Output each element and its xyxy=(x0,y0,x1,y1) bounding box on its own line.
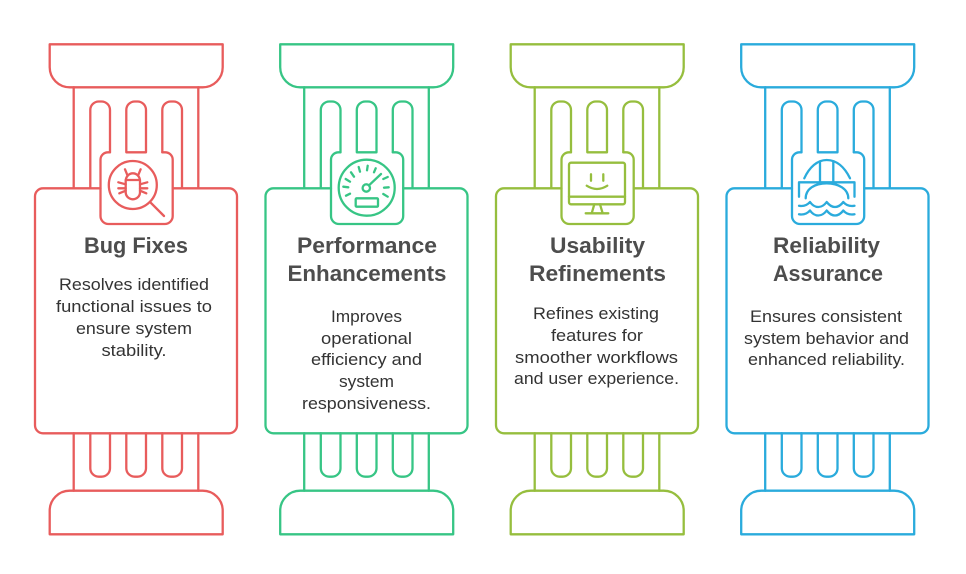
heading: reliability assurance: Reliability xyxy=(773,233,880,258)
text: reliability description: enhanced reliability. xyxy=(748,350,905,369)
heading: performance enhancements xyxy=(288,233,446,286)
text: usability description xyxy=(514,304,679,388)
heading: usability refinements xyxy=(529,233,666,286)
pillar frame: reliability assurance xyxy=(726,44,928,534)
text: bug fixes description: Resolves identified xyxy=(59,275,209,294)
text: performance description: Improves xyxy=(331,307,402,326)
text: performance description: operational xyxy=(321,329,412,348)
pillar frame: performance enhancements xyxy=(266,44,468,534)
heading: performance enhancements: Performance xyxy=(297,233,437,258)
text: reliability description xyxy=(744,307,909,369)
heading: usability refinements: Refinements xyxy=(529,261,666,286)
panel: performance enhancements xyxy=(266,44,468,534)
text: bug fixes description xyxy=(56,275,212,360)
pillar frame: bug fixes xyxy=(35,44,237,534)
heading: performance enhancements: Enhancements xyxy=(288,261,446,286)
heading: reliability assurance xyxy=(773,233,883,286)
icon: smiling monitor xyxy=(569,163,625,213)
icon: bug under magnifier xyxy=(109,161,164,216)
icon: bridge over water xyxy=(799,160,854,216)
text: usability description: features for xyxy=(551,326,643,345)
text: reliability description: Ensures consistent xyxy=(750,307,902,326)
text: bug fixes description: functional issues to xyxy=(56,297,212,316)
panel: reliability assurance xyxy=(726,44,928,534)
icon: speedometer gauge xyxy=(339,160,395,216)
text: bug fixes description: ensure system xyxy=(76,319,192,338)
heading: usability refinements: Usability xyxy=(550,233,645,258)
pillar frame: usability refinements xyxy=(496,44,698,534)
text: usability description: Refines existing xyxy=(533,304,659,323)
text: performance description: efficiency and xyxy=(311,350,422,369)
heading: bug fixes: Bug Fixes xyxy=(84,233,188,258)
text: reliability description: system behavior and xyxy=(744,329,909,348)
panel: bug fixes xyxy=(35,44,237,534)
text: performance description: responsiveness. xyxy=(302,394,431,413)
text: bug fixes description: stability. xyxy=(102,341,166,360)
text: performance description xyxy=(302,307,431,413)
text: usability description: and user experience. xyxy=(514,369,679,388)
heading: reliability assurance: Assurance xyxy=(773,261,883,286)
text: performance description: system xyxy=(339,372,394,391)
text: usability description: smoother workflows xyxy=(515,348,678,367)
panel: usability refinements xyxy=(496,44,698,534)
